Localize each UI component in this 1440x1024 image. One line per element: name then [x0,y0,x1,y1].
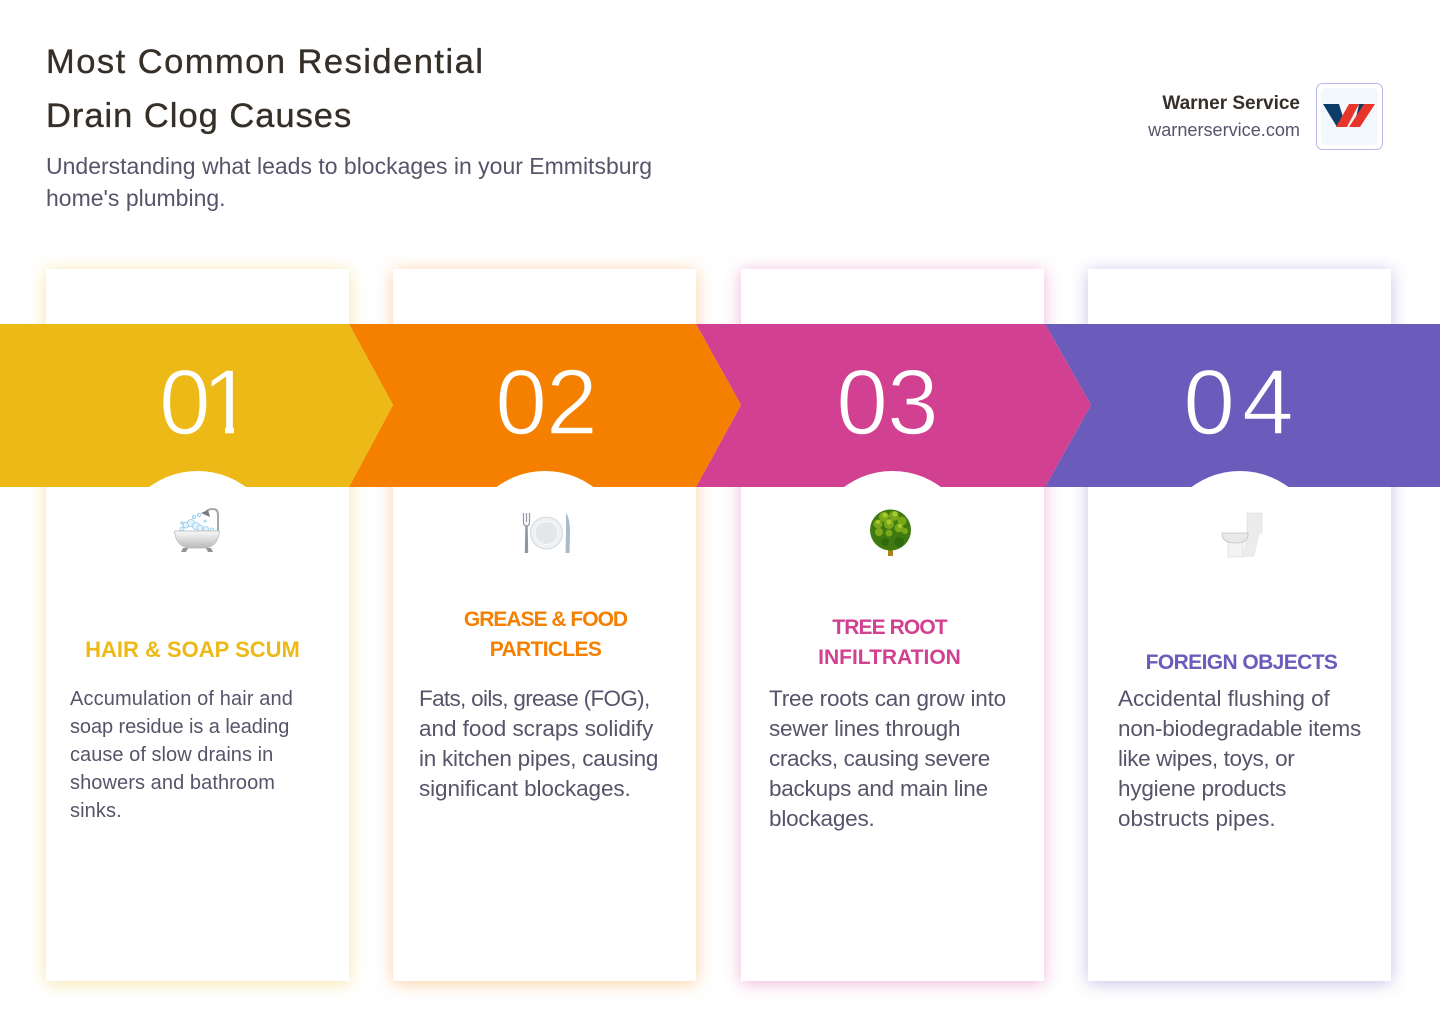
icon: tree [870,510,911,556]
text: tree root infiltration: backups and main line [769,776,988,801]
panel: card 4 [1088,269,1391,981]
text: hair and soap scum: showers and bathroom [70,772,275,794]
brand name and website: warnerservice.com [1148,120,1300,140]
title [46,43,484,135]
panel: card 3 [741,269,1044,981]
text: foreign objects: non-biodegradable items [1118,716,1361,741]
text: tree root infiltration: Tree roots can grow into [769,686,1006,711]
text: tree root infiltration: sewer lines through [769,716,960,741]
heading: tree root infiltration [818,616,961,669]
text: foreign objects [1118,686,1361,831]
text: grease and food particles [419,686,658,801]
icon: plate and cutlery [522,513,570,553]
logo [1316,83,1383,150]
number 01: 0 [159,350,211,454]
heading: foreign objects: FOREIGN OBJECTS [1146,651,1337,674]
text: grease and food particles: and food scraps solidify [419,716,653,741]
text: hair and soap scum: sinks. [70,800,122,822]
text: foreign objects: like wipes, toys, or [1118,746,1294,771]
text: foreign objects: obstructs pipes. [1118,806,1276,831]
brand name and website: Warner Service [1162,93,1300,114]
title: Drain Clog Causes [46,97,352,135]
number 01 [159,350,234,454]
text: foreign objects: hygiene products [1118,776,1286,801]
text: tree root infiltration [769,686,1006,831]
text: hair and soap scum [70,688,293,822]
heading: tree root infiltration: TREE ROOT [832,616,947,639]
title: Most Common Residential [46,43,484,81]
heading: grease and food particles: GREASE & FOOD [464,608,627,631]
panel: card 2 [393,269,696,981]
heading: tree root infiltration: INFILTRATION [818,646,961,669]
number 02: 02 [495,350,597,454]
icon: toilet [1222,512,1262,558]
arrow 4 [1045,324,1440,487]
arrow band [0,324,1440,487]
text: foreign objects: Accidental flushing of [1118,686,1330,711]
subtitle: Understanding what leads to blockages in your Emmitsburg [46,153,652,179]
subtitle [46,153,652,211]
number 01: 1 [202,350,254,454]
heading: grease and food particles [464,608,628,661]
heading: hair and soap scum: HAIR & SOAP SCUM [85,637,300,662]
circle tabs [116,471,1321,633]
arrow 3 [696,324,1091,487]
text: tree root infiltration: blockages. [769,806,875,831]
text: grease and food particles: Fats, oils, grease (FOG), [419,686,650,711]
icon: bathtub [174,508,220,552]
brand name and website [1148,93,1300,140]
subtitle: home's plumbing. [46,185,226,211]
text: hair and soap scum: cause of slow drains in [70,744,273,766]
heading: grease and food particles: PARTICLES [490,638,601,661]
number 04: 04 [1183,350,1301,454]
text: hair and soap scum: Accumulation of hair and [70,688,293,710]
number 03: 03 [836,350,938,454]
text: grease and food particles: significant blockages. [419,776,631,801]
text: hair and soap scum: soap residue is a leading [70,716,289,738]
arrow 2 [349,324,741,487]
text: grease and food particles: in kitchen pipes, causing [419,746,658,771]
text: tree root infiltration: cracks, causing severe [769,746,990,771]
panel: card 1 [46,269,349,981]
arrow 1 [0,324,393,487]
